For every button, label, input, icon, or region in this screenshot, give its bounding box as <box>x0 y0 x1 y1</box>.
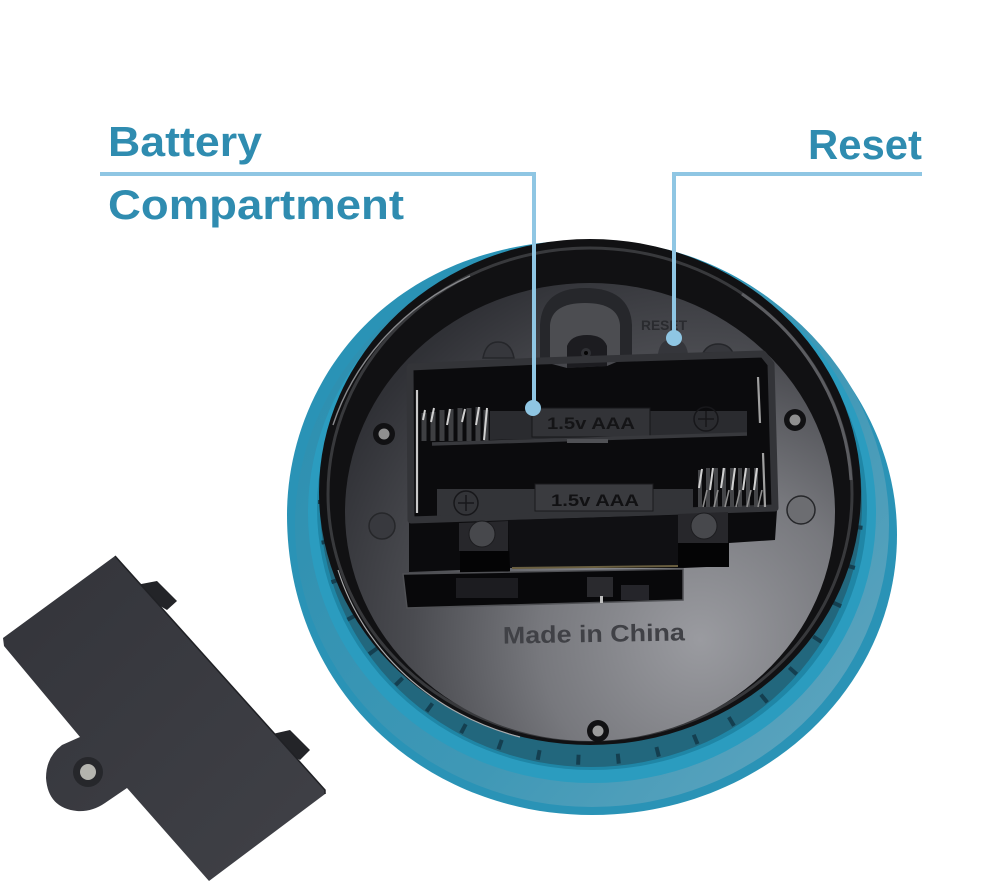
hinge boss <box>540 288 632 368</box>
electronics window <box>403 569 683 608</box>
plus symbol, upper cell <box>694 407 718 431</box>
callout line: reset <box>666 174 922 346</box>
spring, lower cell <box>699 468 762 507</box>
label: Reset: Reset <box>808 121 922 168</box>
teal outer shell <box>287 240 897 815</box>
black inner rim <box>319 239 861 745</box>
reset button recess <box>658 339 688 354</box>
cover latch tabs <box>136 581 310 760</box>
lower label <box>535 484 653 511</box>
lower cell floor <box>437 489 693 516</box>
plate bumps near holder <box>483 342 733 358</box>
cover screw <box>73 757 103 787</box>
label: Compartment: Compartment <box>108 181 404 228</box>
upper label: 1.5v AAA <box>547 414 635 433</box>
lower label: 1.5v AAA <box>551 491 639 510</box>
fluted dark band <box>320 241 862 767</box>
clip lugs <box>459 521 508 551</box>
center slot <box>508 515 678 568</box>
embossed text: Made in China <box>503 619 686 650</box>
label: Battery: Battery <box>108 118 263 165</box>
side contacts <box>416 390 418 513</box>
device: round base seen from below <box>287 239 897 815</box>
battery holder <box>407 352 777 573</box>
divider <box>432 434 747 444</box>
callout line: battery compartment <box>100 174 541 416</box>
embossed RESET mark: RESET <box>641 317 687 333</box>
plate dimples <box>369 496 815 539</box>
grey plate <box>345 283 835 741</box>
upper label <box>532 408 650 437</box>
spring, upper cell <box>423 407 487 441</box>
battery cover <box>3 556 325 881</box>
plus symbol, lower cell <box>454 491 478 515</box>
upper cell floor <box>490 411 747 440</box>
screws <box>373 409 806 742</box>
